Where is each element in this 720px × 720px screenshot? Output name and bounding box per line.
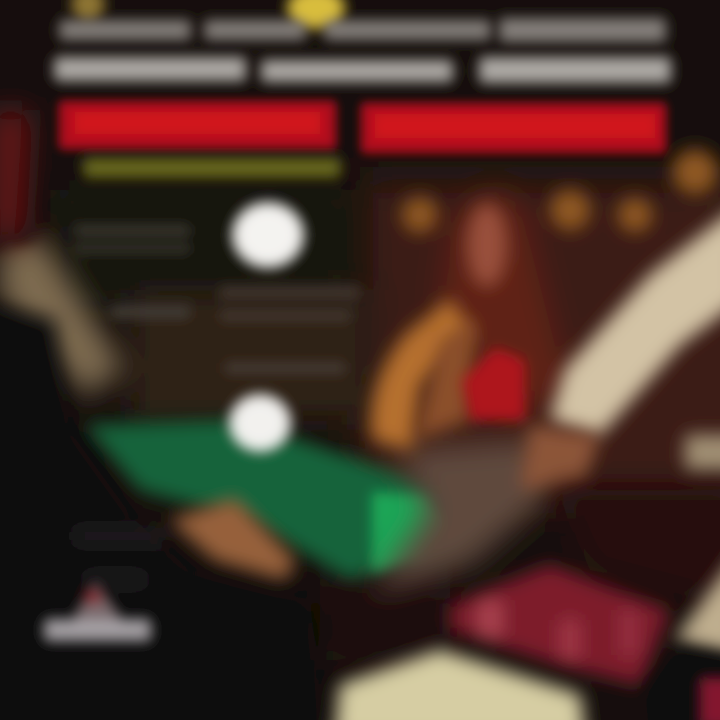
- red headline right: [362, 104, 665, 152]
- left foreground figure: [0, 0, 325, 720]
- logo mark: [45, 582, 150, 640]
- face: [467, 203, 507, 287]
- text block left: [75, 226, 190, 318]
- title line 1: [60, 19, 665, 41]
- dress: [462, 348, 525, 420]
- title: [55, 0, 670, 177]
- text block lower: [75, 530, 165, 584]
- white badge bottom: [230, 395, 290, 451]
- red headline left: [60, 102, 335, 148]
- yellow subtitle: [84, 159, 340, 177]
- text block right: [220, 288, 360, 373]
- title line 2: [55, 58, 670, 82]
- head and hair: [0, 0, 50, 250]
- arm: [371, 298, 472, 450]
- lower body: [370, 440, 545, 595]
- hand over table: [170, 498, 295, 580]
- white badge top: [233, 203, 303, 267]
- green card table: [85, 420, 450, 580]
- woman in red dress: [370, 194, 570, 595]
- stack of red chips: [450, 565, 670, 685]
- hair: [440, 194, 570, 420]
- chest: [415, 320, 475, 440]
- right foreground arm: [520, 205, 720, 655]
- title badges: [72, 0, 344, 28]
- body: [0, 300, 325, 720]
- dark lower right object: [645, 645, 720, 720]
- shoulder: [0, 235, 125, 395]
- background lights: [402, 150, 717, 233]
- paper on table: [335, 650, 585, 720]
